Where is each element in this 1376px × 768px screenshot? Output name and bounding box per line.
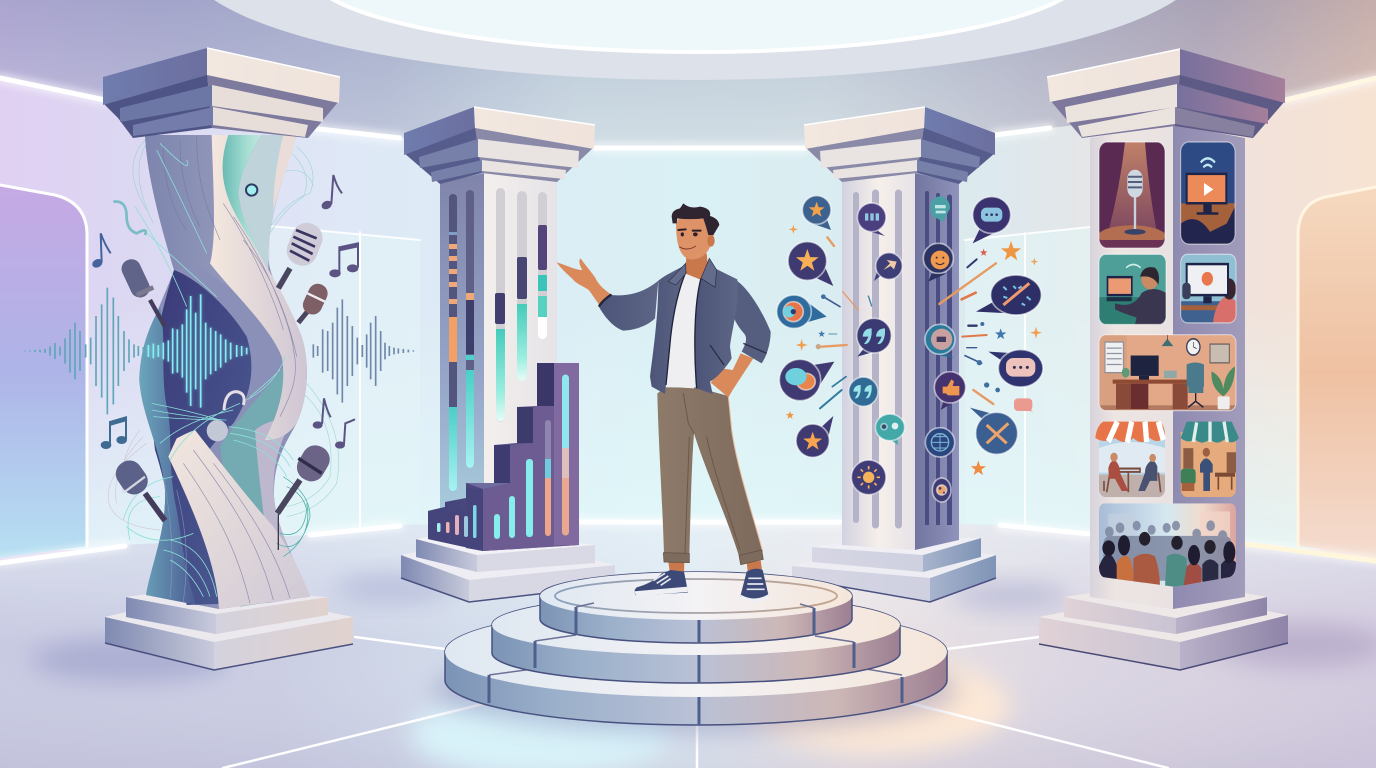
bubble: smile [923, 243, 953, 282]
ribbon fold lines [163, 137, 297, 603]
bubble: people [857, 203, 886, 236]
spark dots [816, 294, 1000, 392]
microphone: lower left [111, 455, 165, 521]
bubble: crossed [976, 275, 1041, 315]
bubble: face ring [925, 324, 955, 358]
presenter figure [557, 203, 771, 602]
hip arm hand [711, 353, 753, 397]
bubble: teal building [930, 196, 950, 222]
right glowing wall panel [1298, 187, 1376, 558]
stepped bar chart block [428, 363, 579, 551]
node eye on teal ribbon [246, 184, 257, 196]
bubble: mini blue [973, 197, 1011, 243]
capital [1047, 49, 1285, 138]
floor [0, 522, 1376, 768]
panel: cafe with two people [1095, 422, 1165, 497]
jacket left panel [650, 265, 686, 394]
panel: office [1099, 335, 1236, 411]
rising bars [494, 375, 569, 539]
second pillar: rising audio bars [401, 107, 615, 602]
bubble: quote [857, 318, 891, 357]
bubble: pin [874, 253, 902, 281]
bubble: teal small [875, 414, 905, 445]
music notes [91, 175, 358, 449]
background thin sound lines [108, 140, 339, 530]
raised hand and forearm [557, 258, 612, 305]
spark dashes blue [820, 259, 982, 408]
background: room walls [0, 0, 1376, 560]
note single top right [320, 175, 342, 211]
blue left ribbon [139, 307, 197, 605]
dark core [152, 270, 251, 605]
left glowing wall panel [0, 185, 87, 558]
cream lower ribbon [168, 430, 310, 609]
note double right [329, 243, 358, 277]
hip arm sleeve [730, 278, 771, 363]
flowing teal fibres [123, 143, 310, 597]
central stepped podium [434, 572, 958, 734]
shaft silhouette [139, 135, 310, 609]
waveform glow [148, 294, 247, 408]
bubble: blue cross [970, 408, 1018, 454]
microphone: mid right [298, 281, 331, 323]
panel rims [1099, 142, 1236, 411]
bubble: small dots [932, 478, 951, 502]
bubble: small star [802, 196, 831, 230]
flute 4 [517, 191, 527, 381]
panel: woman at computer [1181, 254, 1236, 323]
t-shirt [665, 272, 701, 388]
bubble: chat pair [779, 359, 834, 401]
microphone: lower right [277, 440, 335, 550]
bubble: ring [777, 295, 827, 328]
microphone: upper right silver [278, 218, 327, 288]
teal right lower ribbon [220, 363, 307, 607]
front row [1099, 532, 1236, 587]
left pillar: twisted voice column [25, 48, 413, 670]
neck [685, 253, 708, 279]
bubble: star lower [796, 416, 833, 457]
top tier [540, 572, 852, 643]
bubbles and sparks cluster [777, 196, 1043, 502]
panel: audience crowd [1099, 503, 1236, 589]
scene panels [1095, 142, 1239, 589]
base [401, 535, 615, 602]
back row [1103, 520, 1232, 581]
trousers [657, 387, 763, 565]
fourth pillar: venue scenes [1039, 49, 1288, 670]
collar [668, 258, 717, 287]
bubble: pink [988, 350, 1043, 387]
flute 5 [538, 192, 547, 340]
bubble: thumb [934, 372, 966, 410]
grey upper ribbon [145, 135, 253, 303]
bubble: salmon mini [1014, 398, 1033, 412]
microphone: upper left [118, 256, 165, 327]
note single left [91, 233, 111, 269]
note single lower right a [313, 398, 331, 429]
bottom tier [445, 607, 947, 725]
bubble: teal quote [849, 377, 878, 406]
head [672, 203, 719, 259]
base [792, 538, 996, 602]
note single lower right b [335, 419, 355, 449]
panel: stage with microphone [1098, 142, 1165, 248]
shaft faces [440, 173, 484, 520]
bubble: globe [925, 428, 955, 457]
bubble: large star [788, 242, 833, 286]
spark dashes orange [822, 237, 996, 404]
bubble: sun [851, 460, 886, 495]
middle tier [492, 595, 900, 683]
podium shadow [434, 646, 958, 734]
cream main ribbon [210, 135, 307, 440]
loop nodes [207, 420, 228, 441]
jacket right panel [695, 268, 738, 394]
shoes [634, 569, 769, 602]
shaft faces [1090, 124, 1173, 609]
third pillar: speech bubbles [777, 107, 1043, 602]
stars [786, 241, 1021, 475]
panel: streaming monitor [1181, 142, 1237, 244]
teal upper ribbon [218, 135, 268, 270]
extended sleeve [598, 281, 658, 331]
pillar base [105, 594, 353, 670]
flute 2 with level markers [466, 190, 474, 468]
panel: cafe doorway [1181, 422, 1239, 497]
ceiling ellipse [185, 0, 1205, 80]
sparkles [789, 225, 1042, 351]
base [1039, 593, 1288, 670]
small bars [437, 505, 476, 538]
upper wall band [0, 0, 1376, 148]
panel: man at computer [1099, 254, 1166, 324]
waveform bars [25, 288, 143, 414]
capital [804, 107, 995, 184]
twisted shaft and microphones [25, 135, 413, 609]
note double lower left [101, 417, 127, 449]
flutes [853, 190, 952, 529]
ankles [668, 561, 763, 576]
flute 1 with level markers [449, 194, 457, 491]
shaft faces [842, 173, 915, 550]
flute 3 [495, 188, 505, 422]
left pillar capital [103, 48, 340, 138]
capital [404, 107, 595, 184]
